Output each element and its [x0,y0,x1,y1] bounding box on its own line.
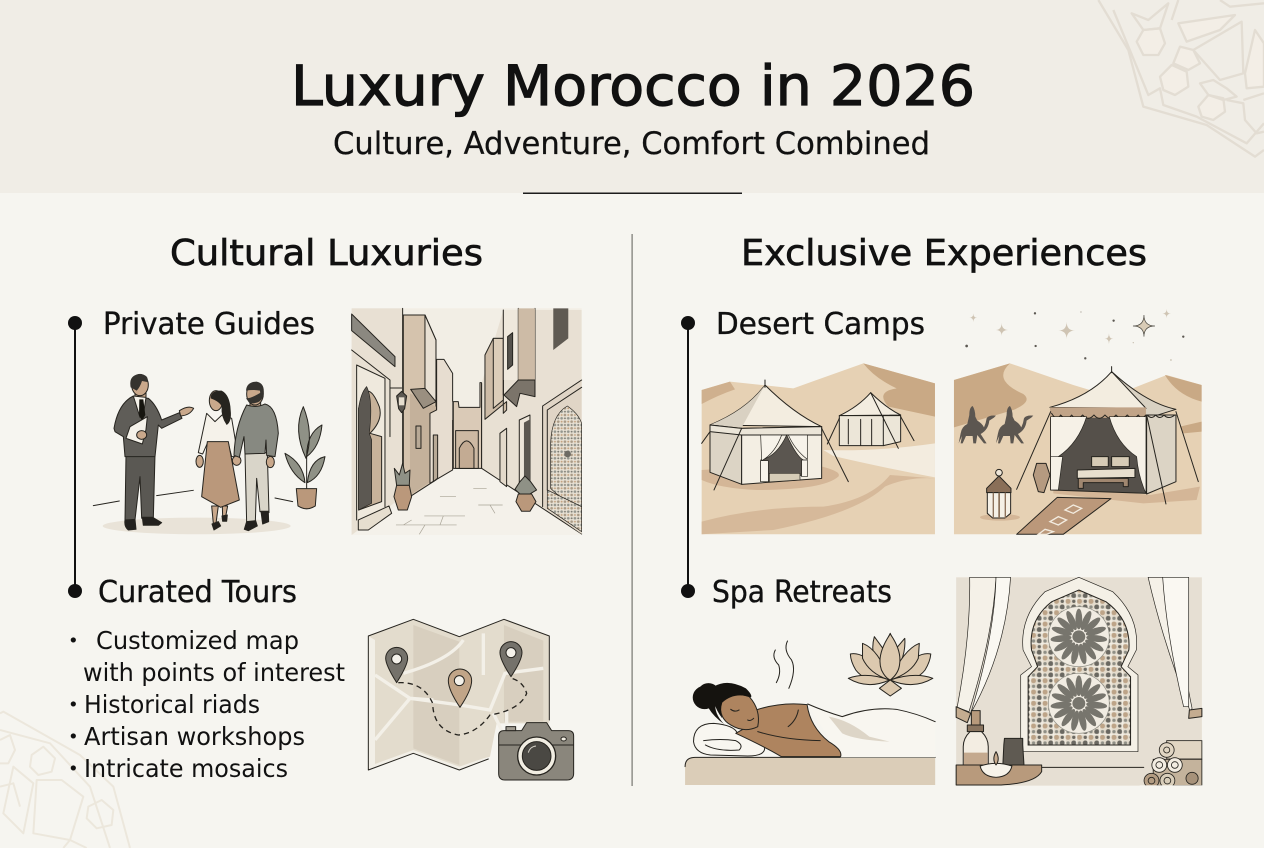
subtitle: Culture, Adventure, Comfort Combined [333,126,930,162]
curated tours list: Artisan workshops [84,722,305,751]
curated tours list: • [68,758,79,780]
camera [499,723,574,780]
geometric ornament top right [1098,0,1264,157]
subheading: curated tours: Curated Tours [98,575,297,610]
timeline left [68,316,82,598]
big tent [1017,367,1200,504]
vase [1033,463,1050,493]
curated tours list: • [68,694,79,716]
illustration: medina alley [352,308,582,535]
pillow [694,723,765,756]
guide figure [114,374,194,530]
pins [386,642,522,707]
dark jar [1003,738,1024,773]
potted plant [285,407,325,509]
mosaic window [1021,577,1138,752]
rolled towels [1144,741,1202,788]
right plant pot [515,476,537,511]
illustration: luxury tent at night [954,309,1202,534]
roof tiles [352,314,395,367]
sheet [808,704,935,757]
tray [956,765,1042,785]
wall lantern [390,388,407,413]
candle bowl [980,752,1012,777]
woman [693,683,841,757]
lotus [848,633,933,696]
man figure [234,382,278,531]
geometric ornament bottom left [0,712,130,848]
camels [959,406,1033,443]
far gate [453,402,482,420]
curated tours list: Intricate mosaics [84,754,288,783]
subheading: spa retreats: Spa Retreats [712,575,892,610]
small tent [827,393,914,448]
left plant pot [394,463,412,510]
heading: exclusive experiences: Exclusive Experiences [741,233,1147,274]
curated tours list: • [68,726,79,748]
right buildings [482,310,582,533]
header band [0,0,1264,194]
illustration: map and camera [368,619,574,780]
curated tours list: Historical riads [84,690,260,719]
stars [969,309,1171,344]
title: Luxury Morocco in 2026 [291,54,975,118]
center divider [632,234,633,786]
floor [352,468,582,535]
curtains [956,577,1202,723]
illustration: guide with couple [93,374,325,534]
subheading: desert camps: Desert Camps [716,307,925,342]
curated tours list: Customized map [96,626,299,655]
illustration: desert tents [702,363,935,534]
left buildings [352,308,403,535]
illustration: spa room with mosaic window [956,577,1204,790]
heading: cultural luxuries: Cultural Luxuries [170,233,483,274]
lantern [980,469,1020,521]
oil bottle [963,711,988,775]
woman figure [196,391,241,530]
arched door [357,365,392,530]
timeline right [681,316,695,598]
illustration: massage [685,633,935,785]
large tent [702,380,848,490]
rug [1017,497,1111,534]
curated tours list [68,626,345,783]
curated tours list: • [68,630,79,652]
mosaic window on right wall [543,380,582,534]
route [398,678,527,735]
wall base [1042,766,1144,769]
curated tours list: with points of interest [83,658,345,687]
subheading: private guides: Private Guides [103,307,315,342]
steam [774,641,794,688]
